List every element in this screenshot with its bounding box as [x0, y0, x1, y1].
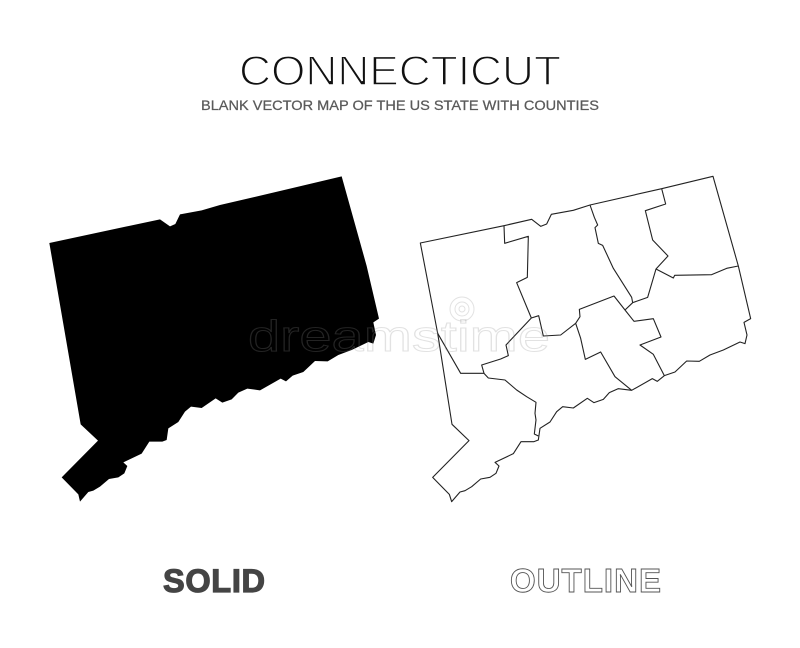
title: CONNECTICUT [239, 47, 561, 94]
label: solid: SOLID [163, 563, 265, 599]
outline map with county borders [420, 176, 751, 502]
subtitle: BLANK VECTOR MAP OF THE US STATE WITH COUNTIES [201, 98, 599, 113]
state outer border [420, 176, 751, 502]
watermark [248, 297, 550, 361]
label: outline: OUTLINE [510, 562, 661, 599]
watermark: dreamstime [248, 312, 550, 361]
county borders [438, 189, 738, 436]
solid map of Connecticut [49, 176, 379, 502]
